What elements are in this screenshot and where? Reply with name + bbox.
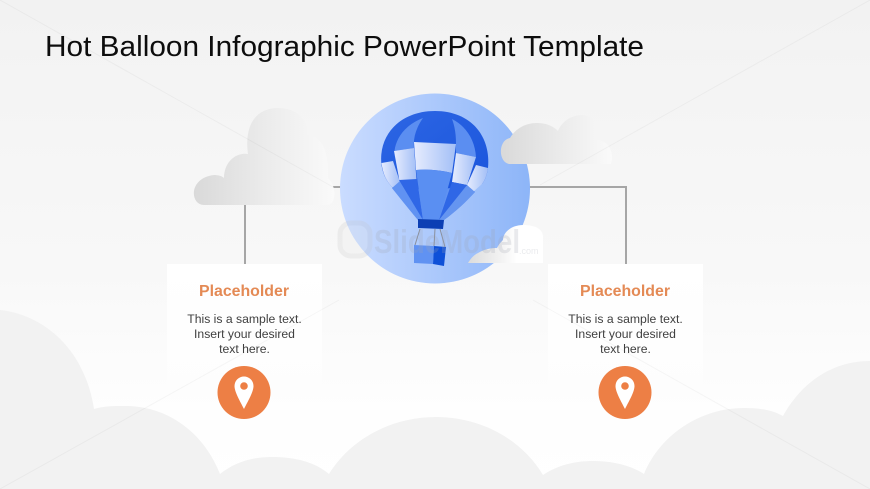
- basket band: [418, 219, 444, 229]
- right body text: This is a sample text.: [568, 312, 683, 326]
- title: Hot Balloon Infographic PowerPoint Template: [45, 31, 644, 63]
- watermark: .com: [519, 246, 539, 256]
- right cloud: [501, 115, 612, 164]
- ropes: [415, 229, 445, 247]
- connector lines: [245, 187, 626, 264]
- left large cloud: [194, 108, 334, 205]
- bottom cloud bank: [0, 310, 870, 489]
- balloon envelope: [381, 111, 488, 220]
- left body text: This is a sample text.: [187, 312, 302, 326]
- central circle: [340, 94, 530, 284]
- left heading: Placeholder: [199, 283, 289, 300]
- small cloud over circle: [468, 225, 543, 263]
- icon: right map pin: [598, 366, 652, 419]
- icon: left map pin: [218, 366, 270, 419]
- left body text: text here.: [219, 342, 270, 356]
- right body text: Insert your desired: [575, 327, 676, 341]
- right body text: text here.: [600, 342, 651, 356]
- panel: right placeholder: [548, 264, 703, 419]
- basket: [414, 245, 446, 266]
- left body text: Insert your desired: [194, 327, 295, 341]
- right heading: Placeholder: [580, 283, 670, 300]
- watermark: SlideModel: [374, 223, 520, 260]
- hot air balloon: [381, 111, 488, 266]
- panel: left placeholder: [167, 264, 322, 419]
